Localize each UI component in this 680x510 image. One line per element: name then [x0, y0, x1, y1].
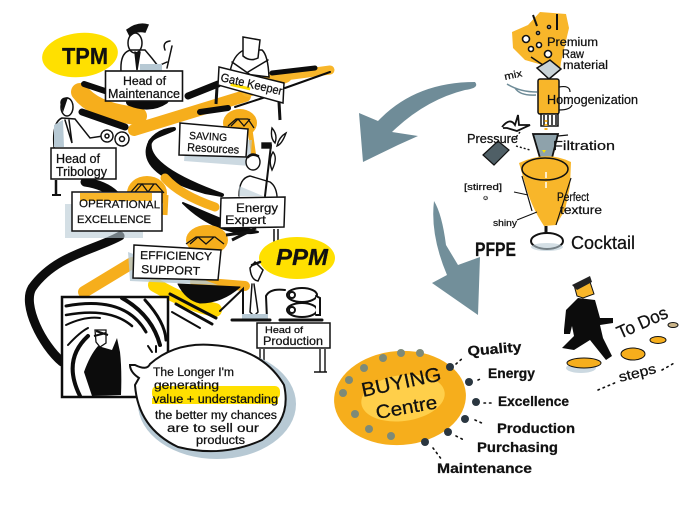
label: steps: steps: [617, 360, 658, 385]
panel: tunnel with salesperson: [62, 297, 168, 397]
icon: rollers machine: [280, 288, 322, 320]
labels: buying centre roles: Purchasing: [477, 440, 558, 455]
sign: Head of Maintenance: Head of: [123, 76, 167, 88]
bubble text: the better my chances: [155, 410, 277, 422]
icon: bridge over Saving Resources: [223, 109, 257, 137]
pressure icon and label: [467, 115, 530, 165]
labels: buying centre roles: Energy: [488, 366, 535, 381]
title: PFPE Cocktail: [475, 233, 635, 261]
title: PFPE Cocktail: Cocktail: [571, 233, 635, 253]
orange road upper: [80, 70, 330, 130]
TPM badge: [40, 29, 120, 81]
steps: [566, 322, 678, 373]
label: Perfect texture: [557, 192, 602, 217]
sign: Head of Tribology: Tribology: [56, 165, 108, 179]
sign: Efficiency Support: EFFICIENCY: [140, 250, 212, 263]
person: walking man: [562, 276, 613, 360]
labels: buying centre roles: Excellence: [498, 394, 569, 409]
arrow: grey downward: [432, 201, 480, 315]
sign: Gate Keeper: Gate Keeper: [219, 70, 284, 98]
title: Buying Centre: Centre: [374, 392, 439, 424]
title: PPM: PPM: [276, 244, 329, 270]
homogenizer vessel: [503, 68, 572, 126]
title: PFPE Cocktail: PFPE: [475, 240, 516, 261]
sign: Operational Excellence: OPERATIONAL: [79, 198, 160, 211]
sign: Head of Tribology: Head of: [56, 152, 101, 166]
label: Premium Raw Material: [547, 37, 608, 72]
sign: Energy Expert: [220, 197, 285, 243]
labels: buying centre roles: Quality: [467, 338, 522, 359]
notes: stirred and shiny: [464, 182, 537, 229]
ring dots: [339, 349, 480, 446]
raw material splash: [512, 12, 569, 80]
panel: road system: [29, 68, 330, 362]
sign: Head of Production: [257, 323, 330, 372]
PPM badge: [259, 237, 335, 279]
title: TPM: TPM: [62, 43, 108, 69]
icon: wind turbine: [262, 128, 286, 196]
label: Perfect texture: Perfect: [557, 192, 590, 204]
winding black road: [29, 108, 258, 362]
sign: Operational Excellence: [65, 192, 162, 238]
bubble text: [153, 367, 278, 447]
icon: bridge over Operational Excellence: [127, 176, 167, 215]
bubble text: value + understanding: [153, 394, 278, 406]
label: Filtration: Filtration: [553, 138, 615, 153]
tunnel strokes: [66, 298, 166, 396]
notes: stirred and shiny: [stirred]: [464, 182, 502, 193]
notes: stirred and shiny: ☺: [482, 195, 489, 202]
title: Buying Centre: [359, 364, 443, 424]
icon: gears: [101, 130, 129, 146]
person: Head of Production: [220, 262, 322, 320]
person: salesperson silhouette: [84, 330, 121, 396]
icon: bridge over Efficiency Support: [186, 225, 256, 255]
labels: buying centre roles: [437, 338, 575, 476]
filtration funnel: [533, 120, 568, 163]
person: Head of Tribology: [54, 98, 129, 147]
person: Energy Expert: [239, 128, 286, 196]
black road upper: [82, 68, 330, 127]
panel: buying centre: [331, 338, 575, 476]
labels: buying centre roles: Production: [497, 420, 575, 436]
sign: Energy Expert: Expert: [225, 213, 267, 227]
sign: Efficiency Support: [128, 245, 221, 285]
sign: Saving Resources: [179, 123, 254, 166]
notes: stirred and shiny: shiny: [493, 218, 517, 229]
sign: Efficiency Support: SUPPORT: [141, 264, 200, 278]
sign: Head of Tribology: [51, 148, 116, 195]
sign: Head of Production: Production: [263, 334, 323, 348]
sign: Saving Resources: SAVING: [189, 130, 227, 144]
speech bubble: [130, 345, 296, 459]
sign: Energy Expert: Energy: [236, 201, 278, 215]
label: Premium Raw Material: Raw: [562, 49, 585, 61]
black road lower: [170, 284, 240, 328]
sign: Head of Maintenance: Maintenance: [108, 86, 180, 101]
homogenizer vessel: mix: [503, 68, 523, 83]
pressure icon and label: Pressure: [467, 131, 518, 146]
cocktail glass: [519, 156, 571, 251]
sign: Operational Excellence: EXCELLENCE: [77, 214, 151, 226]
sign: Gate Keeper: [216, 67, 284, 120]
orange road lower: [84, 178, 245, 310]
connector dots: [433, 357, 494, 460]
label: To Dos: To Dos: [613, 302, 671, 343]
panel: To Dos walking man: [562, 276, 678, 390]
sign: Saving Resources: Resources: [187, 142, 240, 157]
label: Premium Raw Material: material: [563, 60, 608, 72]
label: Premium Raw Material: Premium: [547, 37, 598, 49]
label: Perfect texture: texture: [560, 205, 602, 217]
bubble text: are to sell our: [167, 423, 259, 435]
bubble text: generating: [154, 380, 219, 392]
title: Buying Centre: BUYING: [359, 364, 443, 402]
arrow: grey to the left: [359, 82, 476, 162]
panel: PFPE cocktail: [464, 12, 638, 261]
label: Homogenization: Homogenization: [547, 92, 638, 107]
labels: buying centre roles: Maintenance: [437, 461, 533, 476]
sign: Head of Production: Head of: [265, 325, 303, 336]
person: Gate Keeper: [230, 37, 269, 77]
sign: Head of Maintenance: [106, 71, 182, 101]
bubble text: The Longer I'm: [153, 367, 234, 379]
person: Head of Maintenance: [121, 24, 172, 71]
bubble text: products: [196, 435, 245, 447]
